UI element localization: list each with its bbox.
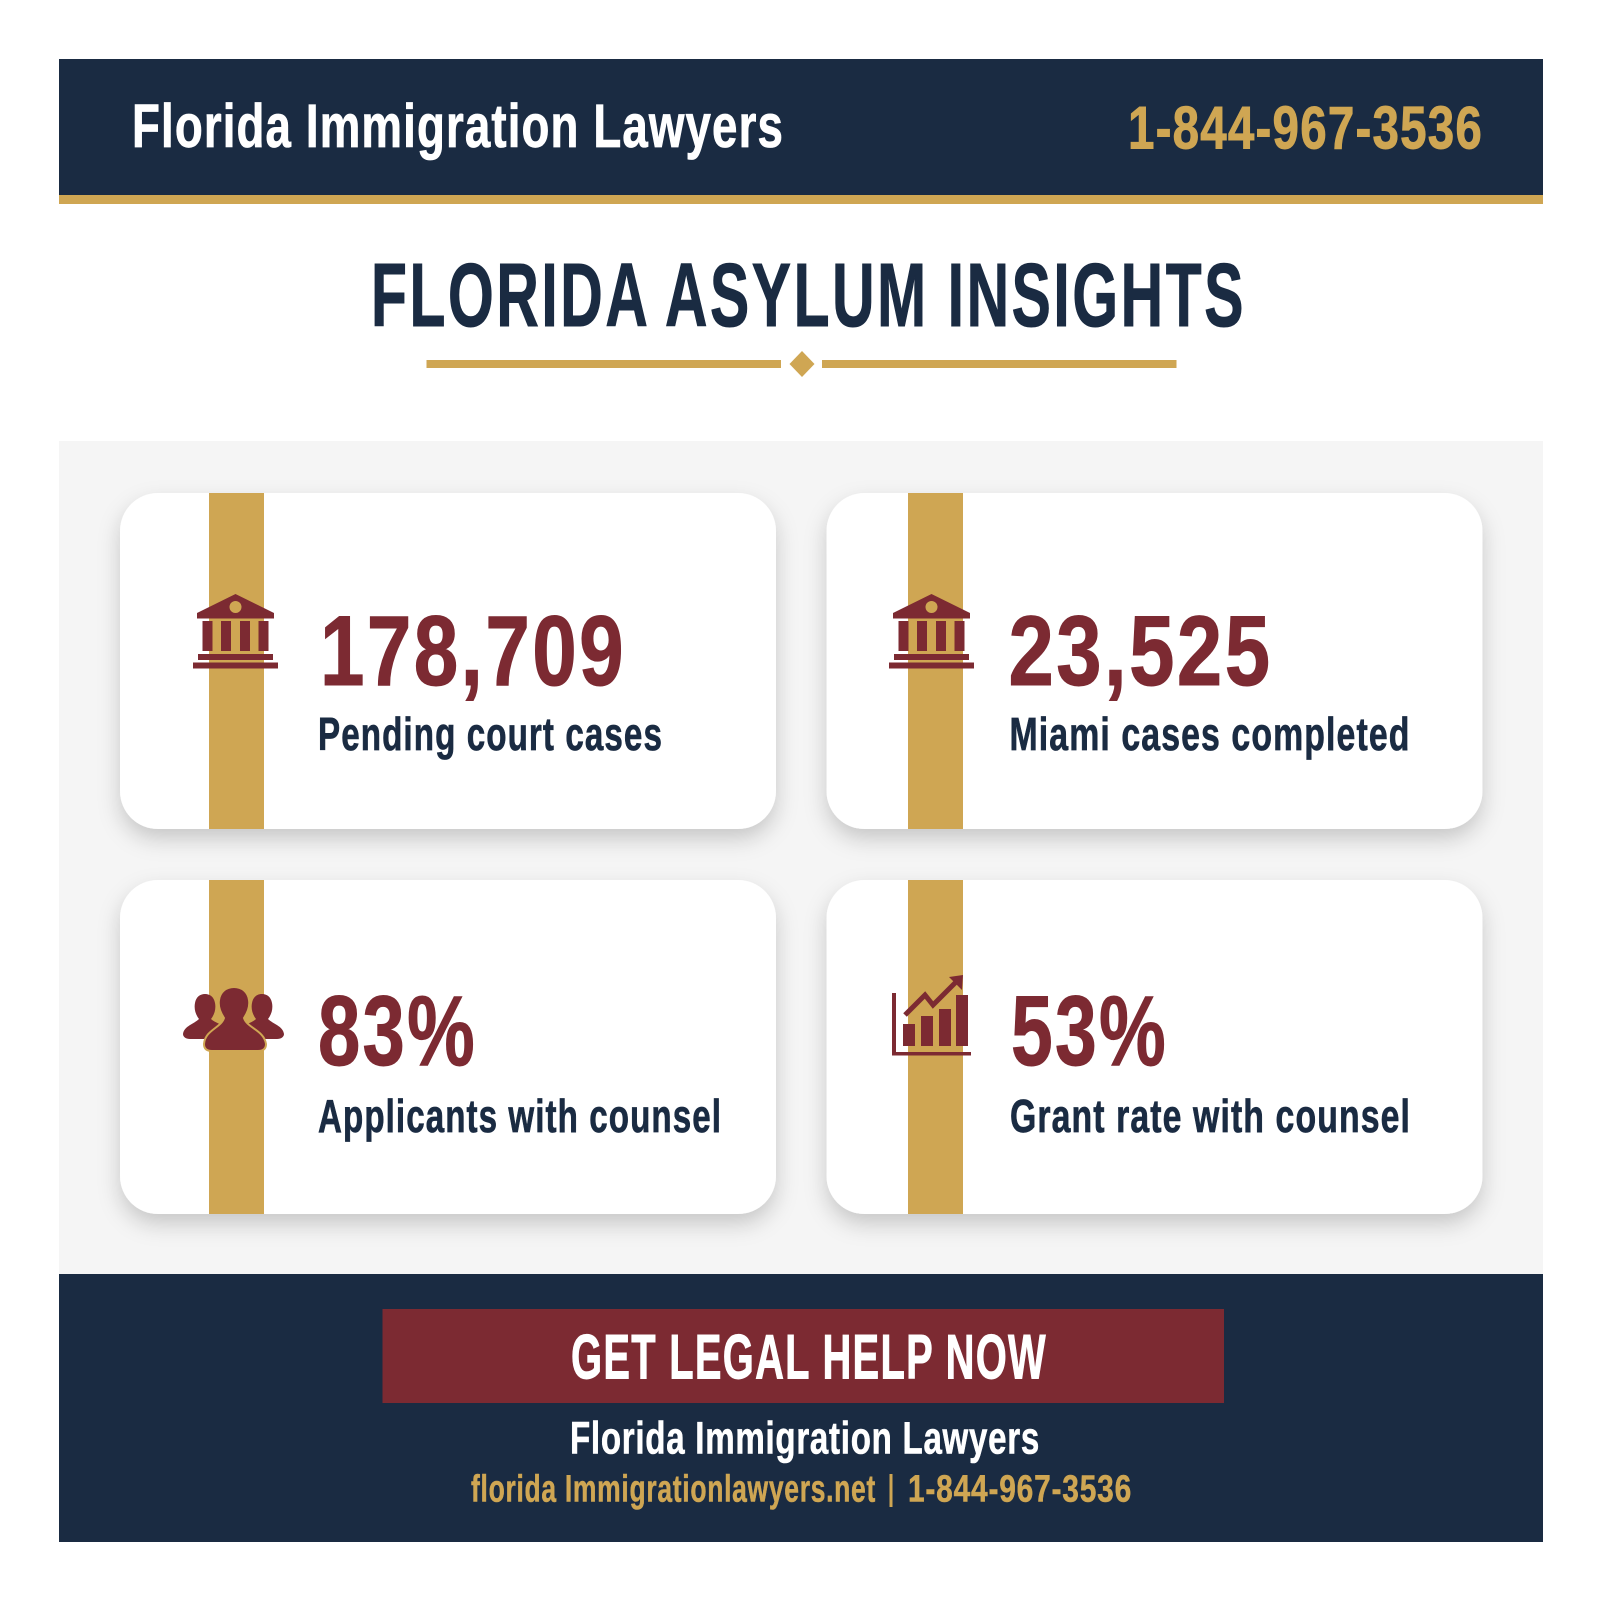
- title divider with diamond: [426, 351, 1176, 377]
- stat label: Grant rate with counsel: [1010, 1090, 1411, 1142]
- icon: rising bar chart: [892, 975, 971, 1056]
- footer phone number: 1-844-967-3536: [908, 1468, 1132, 1510]
- card: pending court cases: [120, 493, 776, 829]
- stat label: Applicants with counsel: [318, 1090, 722, 1142]
- footer website: florida Immigrationlawyers.net: [471, 1468, 876, 1510]
- stat label: Pending court cases: [318, 708, 663, 760]
- icon: courthouse: [193, 594, 278, 668]
- icon: courthouse: [889, 594, 974, 668]
- card: grant rate with counsel: [826, 880, 1482, 1214]
- header bar: [59, 59, 1543, 204]
- card: Miami cases completed: [826, 493, 1482, 829]
- stat number: 53%: [1011, 975, 1168, 1086]
- footer firm name: Florida Immigration Lawyers: [570, 1412, 1040, 1464]
- header phone number: 1-844-967-3536: [1128, 94, 1483, 162]
- card: applicants with counsel: [120, 880, 776, 1214]
- stat number: 178,709: [320, 595, 626, 706]
- header firm name: Florida Immigration Lawyers: [132, 92, 784, 160]
- call to action button: [382, 1309, 1224, 1403]
- stat label: Miami cases completed: [1010, 708, 1410, 760]
- stats panel background: [59, 441, 1543, 1274]
- stat number: 83%: [318, 975, 477, 1086]
- stat number: 23,525: [1008, 595, 1272, 706]
- icon: people group: [183, 987, 284, 1051]
- footer bar: [59, 1274, 1543, 1542]
- call to action button: GET LEGAL HELP NOW: [571, 1322, 1047, 1392]
